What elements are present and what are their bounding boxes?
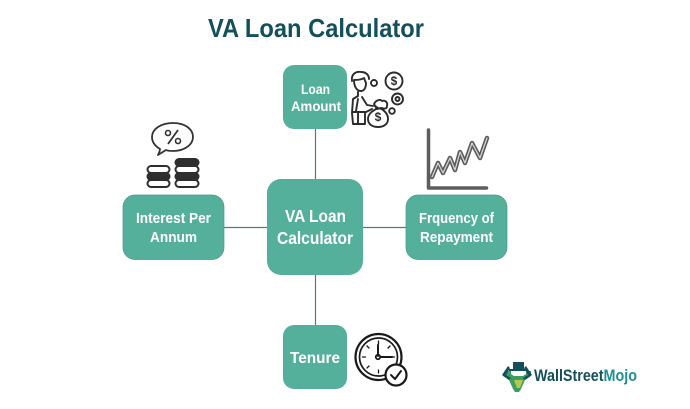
icon: percent speech bubble and coin stacks: [148, 123, 198, 187]
box: Interest Per Annum: Annum: [150, 230, 197, 246]
box: Loan Amount: Amount: [291, 98, 341, 114]
logo wordmark: WallStreetMojo: [534, 367, 637, 385]
box: Frequency of Repayment: [406, 195, 507, 260]
icon: line chart: [428, 130, 487, 188]
central box: VA Loan Calculator: [267, 179, 363, 275]
box: Frequency of Repayment: Frquency of: [419, 211, 494, 227]
logo mark: [502, 362, 532, 392]
box: Tenure: Tenure: [290, 350, 340, 367]
icon: person with money bag and coins: $: [391, 74, 398, 88]
box: Interest Per Annum: Interest Per: [136, 211, 211, 227]
logo: WallStreetMojo: [502, 362, 637, 392]
icon: person with money bag and coins: [352, 72, 403, 127]
box: Frequency of Repayment: Repayment: [420, 230, 493, 246]
central box: VA Loan Calculator: VA Loan: [285, 206, 346, 226]
box: Tenure: [283, 325, 347, 389]
connector lines: [224, 129, 406, 325]
central box: VA Loan Calculator: Calculator: [277, 228, 353, 248]
title: VA Loan Calculator: [208, 13, 424, 43]
box: Loan Amount: Loan: [301, 81, 330, 97]
icon: person with money bag and coins: $: [375, 110, 382, 124]
icon: clock with check mark: [356, 334, 406, 386]
box: Interest Per Annum: [123, 195, 224, 260]
box: Loan Amount: [283, 65, 347, 129]
